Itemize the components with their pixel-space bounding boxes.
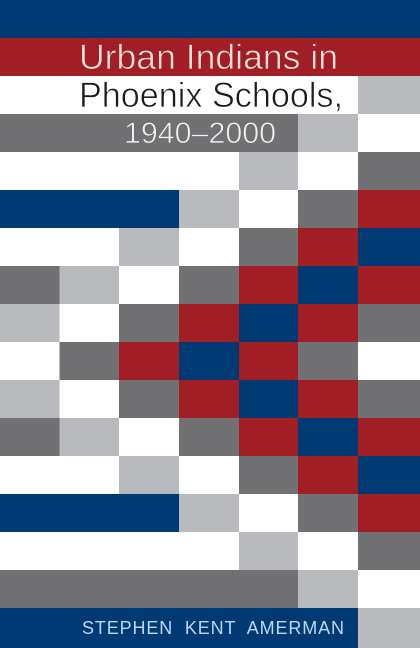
row 3 [0,76,420,114]
row 5 [0,152,420,190]
row 4 [0,114,420,152]
row 6 [0,190,420,228]
title line 1: Urban Indians in [79,38,338,77]
row 1: blue band [0,0,420,38]
row 8 [0,266,420,304]
row 15 [0,532,420,570]
title line 3: dates: 1940–2000 [124,117,276,150]
row 14 [0,494,420,532]
row 2: red band [0,38,420,76]
row 17 [0,608,420,648]
author name: STEPHEN KENT AMERMAN [82,618,344,638]
row 11 [0,380,420,418]
row 13 [0,456,420,494]
row 12 [0,418,420,456]
title line 2: Phoenix Schools, [79,76,343,115]
row 7 [0,228,420,266]
row 16 [0,570,420,608]
row 10 [0,342,420,380]
row 9 [0,304,420,342]
title [79,38,343,150]
